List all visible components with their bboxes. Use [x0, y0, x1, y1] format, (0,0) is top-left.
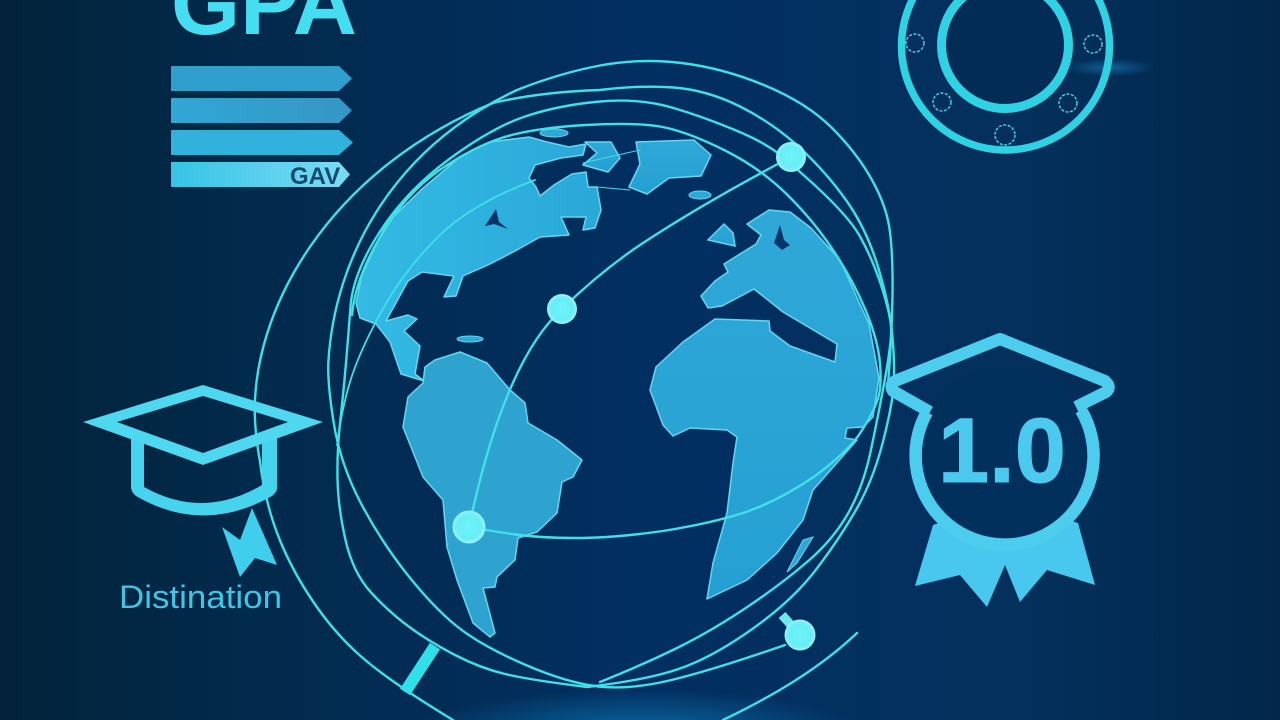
small islands: [457, 129, 813, 572]
island: Greenland: [629, 140, 711, 194]
island: Baffin: [583, 142, 620, 172]
orbit three: through upper node: [337, 101, 891, 687]
label: Distination: Distination: [119, 579, 282, 615]
continent: South America: [403, 352, 582, 637]
node stem: [782, 615, 800, 635]
globe: [356, 129, 879, 637]
outer ring: [902, 0, 1110, 150]
cap outline: [891, 339, 1109, 412]
outer orbit: [255, 87, 894, 720]
continent: North America: [356, 137, 601, 381]
bar 4 with label: [171, 162, 350, 190]
GPA bar stack: [171, 66, 353, 190]
island: Iceland: [708, 224, 735, 246]
ribbon tails: [915, 500, 1095, 607]
orbit lines: [255, 61, 894, 720]
bar 3: [171, 130, 353, 155]
orbit two: to lower node: [328, 61, 893, 687]
medal disc: [915, 367, 1095, 547]
route: node one to node three: [469, 157, 791, 527]
ribbon: [222, 508, 277, 577]
Hudson inlet: [485, 209, 508, 229]
inner ring: [942, 0, 1068, 108]
bar 1: [171, 66, 352, 91]
route nodes: [452, 142, 816, 650]
globe rim and route to node three: [352, 124, 881, 538]
icon: 1.0 award badge: [891, 339, 1109, 607]
continent: Eurasia and Africa: [650, 210, 879, 599]
route: North America thin line: [337, 180, 535, 445]
bottom right arc: [723, 633, 857, 720]
orbit tick mark: [405, 646, 435, 692]
cap base: [131, 436, 277, 516]
badge value: 1.0: [938, 400, 1066, 502]
medal ring: [916, 410, 1094, 545]
bar 4 with label: GAV: [290, 163, 340, 190]
ring icons: [906, 34, 1102, 145]
inner disc shade: [945, 0, 1065, 105]
icon: graduation cap: [83, 385, 323, 577]
route: Greenland links: [583, 150, 640, 190]
bar 2: [171, 98, 352, 123]
mortarboard: [83, 385, 323, 465]
Baltic sea: [774, 225, 790, 250]
icon: progress ring: [902, 0, 1110, 150]
